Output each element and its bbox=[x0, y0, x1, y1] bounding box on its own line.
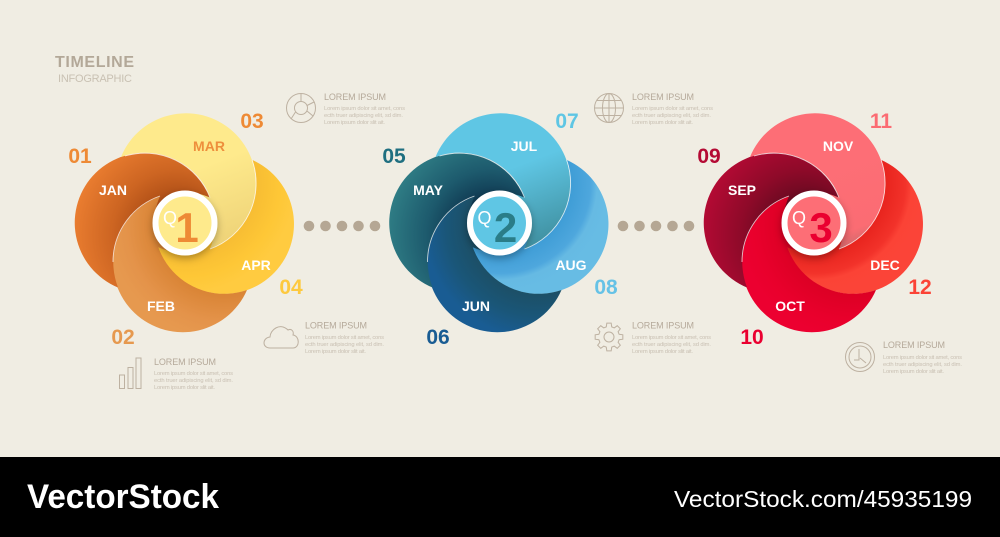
text block: ecth truer adipiscing elit, sd dim. bbox=[324, 113, 403, 119]
icon: globe bbox=[594, 94, 624, 122]
text block: Lorem ipsum dolor slit ait. bbox=[632, 349, 693, 355]
text block bbox=[632, 320, 711, 355]
heading: timeline: TIMELINE bbox=[55, 54, 134, 71]
text block: LOREM IPSUM bbox=[324, 92, 386, 102]
footer url: VectorStock.com/45935199 bbox=[674, 486, 972, 512]
month FEB: FEB bbox=[147, 298, 175, 314]
text block: LOREM IPSUM bbox=[154, 357, 216, 367]
month MAY: MAY bbox=[413, 182, 444, 198]
text block bbox=[324, 92, 405, 126]
text block: Lorem ipsum dolor sit amet, cons bbox=[305, 335, 384, 341]
number 11: 11 bbox=[870, 110, 892, 133]
petal: january bbox=[75, 153, 210, 288]
text block: Lorem ipsum dolor slit ait. bbox=[632, 120, 693, 126]
numeral: 1: 1 bbox=[175, 204, 199, 251]
highlight edges bbox=[742, 153, 885, 262]
text block: Lorem ipsum dolor sit amet, cons bbox=[883, 355, 962, 361]
highlight edges bbox=[428, 153, 571, 262]
numeral: 2: 2 bbox=[494, 204, 517, 251]
number 02: 02 bbox=[111, 326, 135, 349]
number 04: 04 bbox=[279, 276, 303, 299]
number 07: 07 bbox=[555, 110, 579, 133]
icon: gear bbox=[595, 323, 623, 351]
petal: september bbox=[704, 153, 839, 288]
petal: december bbox=[787, 160, 923, 294]
dotted connector: Q1 to Q2 bbox=[304, 221, 380, 231]
text block: Lorem ipsum dolor slit ait. bbox=[883, 369, 944, 375]
label: Q: Q bbox=[792, 208, 806, 228]
petal: july bbox=[436, 113, 570, 249]
footer bar bbox=[0, 457, 1000, 537]
text block: Lorem ipsum dolor slit ait. bbox=[324, 120, 385, 126]
number 01: 01 bbox=[68, 145, 92, 168]
month AUG: AUG bbox=[555, 257, 587, 273]
text block: Lorem ipsum dolor sit amet, cons bbox=[632, 335, 711, 341]
text block: ecth truer adipiscing elit, sd dim. bbox=[883, 362, 962, 368]
number 09: 09 bbox=[697, 145, 721, 168]
petal: november bbox=[750, 113, 885, 249]
center backing bbox=[460, 183, 540, 263]
petal: february bbox=[113, 196, 247, 332]
month APR: APR bbox=[241, 257, 271, 273]
number 05: 05 bbox=[382, 145, 406, 168]
number 03: 03 bbox=[240, 110, 264, 133]
text block: LOREM IPSUM bbox=[632, 320, 694, 330]
labels: quarter 2 months bbox=[382, 110, 618, 349]
highlight edges bbox=[113, 153, 256, 262]
text block bbox=[883, 340, 962, 375]
text block: Lorem ipsum dolor sit amet, cons bbox=[324, 106, 405, 112]
numeral: 3: 3 bbox=[809, 204, 833, 251]
note: cloud bbox=[264, 320, 384, 355]
labels: quarter 1 months bbox=[68, 110, 303, 349]
note: pie chart bbox=[286, 92, 405, 126]
text block: Lorem ipsum dolor sit amet, cons bbox=[154, 371, 233, 377]
panel: quarter 2 flower bbox=[389, 113, 608, 332]
label: Q: Q bbox=[163, 208, 177, 228]
text block: LOREM IPSUM bbox=[632, 92, 694, 102]
footer logo: VectorStock bbox=[27, 478, 219, 516]
note: bar chart bbox=[120, 357, 233, 391]
text block: Lorem ipsum dolor slit ait. bbox=[154, 385, 215, 391]
text block bbox=[154, 357, 233, 391]
icon: clock bbox=[846, 342, 874, 372]
subheading: infographic: INFOGRAPHIC bbox=[58, 73, 132, 85]
panel: quarter 3 flower bbox=[704, 113, 923, 332]
petal: march bbox=[121, 113, 256, 249]
text block: ecth truer adipiscing elit, sd dim. bbox=[154, 378, 233, 384]
month SEP: SEP bbox=[728, 182, 756, 198]
month JUN: JUN bbox=[462, 298, 490, 314]
petal: april bbox=[158, 160, 294, 294]
note: globe bbox=[594, 92, 713, 126]
text block: ecth truer adipiscing elit, sd dim. bbox=[632, 342, 711, 348]
panel: quarter 1 flower bbox=[75, 113, 294, 332]
text block bbox=[632, 92, 713, 126]
text block: LOREM IPSUM bbox=[883, 340, 945, 350]
number 10: 10 bbox=[740, 326, 764, 349]
petal: october bbox=[742, 196, 876, 332]
number 06: 06 bbox=[426, 326, 450, 349]
month JAN: JAN bbox=[99, 182, 127, 198]
note: gear bbox=[595, 320, 711, 355]
month OCT: OCT bbox=[775, 298, 805, 314]
note: clock bbox=[846, 340, 962, 375]
center ring bbox=[156, 194, 214, 252]
label: Q: Q bbox=[477, 208, 492, 228]
text block: Lorem ipsum dolor sit amet, cons bbox=[632, 106, 713, 112]
petal: may bbox=[389, 153, 524, 288]
month MAR: MAR bbox=[193, 138, 225, 154]
number 08: 08 bbox=[594, 276, 618, 299]
icon: cloud bbox=[264, 327, 298, 348]
center backing bbox=[145, 183, 225, 263]
icon: bar chart bbox=[120, 358, 141, 388]
text block: LOREM IPSUM bbox=[305, 320, 367, 330]
footer background bbox=[0, 457, 1000, 537]
month JUL: JUL bbox=[511, 138, 538, 154]
petal: august bbox=[472, 160, 608, 294]
text block: ecth truer adipiscing elit, sd dim. bbox=[632, 113, 711, 119]
dotted connector: Q2 to Q3 bbox=[618, 221, 694, 231]
number 12: 12 bbox=[908, 276, 932, 299]
petal: june bbox=[427, 196, 562, 332]
center ring bbox=[470, 194, 529, 252]
center backing bbox=[774, 183, 854, 263]
icon: pie chart bbox=[286, 94, 316, 122]
month DEC: DEC bbox=[870, 257, 900, 273]
text block bbox=[305, 320, 384, 355]
month NOV: NOV bbox=[823, 138, 854, 154]
center ring bbox=[784, 194, 844, 252]
labels: quarter 3 months bbox=[697, 110, 932, 349]
text block: ecth truer adipiscing elit, sd dim. bbox=[305, 342, 384, 348]
text block: Lorem ipsum dolor slit ait. bbox=[305, 349, 366, 355]
title bbox=[55, 54, 134, 85]
